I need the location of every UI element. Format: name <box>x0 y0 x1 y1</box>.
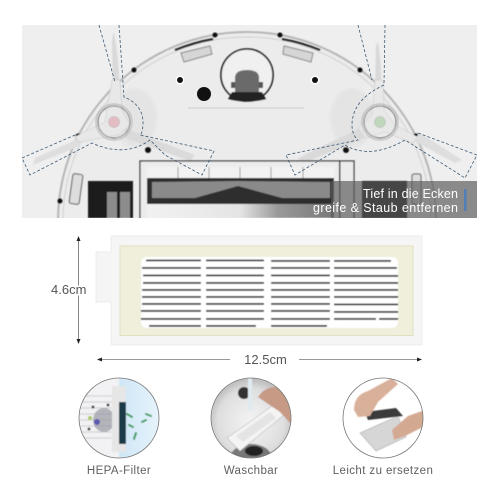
width label: 12.5cm <box>244 352 287 367</box>
filter grille <box>141 257 398 328</box>
caption band: greife & Staub entfernen <box>313 201 458 215</box>
height label: 4.6cm <box>51 282 86 297</box>
blue accent bar <box>464 189 466 211</box>
brush compartment <box>138 160 356 218</box>
icon: replacing filter circle <box>343 378 425 458</box>
height dimension <box>51 236 86 344</box>
left wheel well <box>69 173 133 218</box>
icon: washing under tap circle <box>211 378 292 458</box>
filter product <box>96 236 422 345</box>
photo: robot vacuum underside <box>22 25 477 218</box>
caption band <box>313 181 477 218</box>
front caster wheel <box>221 49 273 102</box>
icon: HEPA filter circle <box>79 378 159 458</box>
filter pleated media <box>120 246 413 336</box>
holes <box>176 76 320 108</box>
dashed brush outlines <box>22 25 477 178</box>
caption text: Tief in die Ecken <box>363 187 458 201</box>
label: Waschbar: Waschbar <box>224 465 278 477</box>
right wheel well <box>362 174 421 218</box>
label: Leicht zu ersetzen: Leicht zu ersetzen <box>333 465 433 477</box>
width dimension <box>97 352 422 367</box>
side brush left <box>33 32 195 165</box>
label: HEPA-Filter: HEPA-Filter <box>87 465 151 477</box>
filter frame <box>96 236 422 345</box>
side brush right <box>298 42 462 163</box>
robot body <box>56 30 437 218</box>
bumper sensors <box>58 32 418 204</box>
